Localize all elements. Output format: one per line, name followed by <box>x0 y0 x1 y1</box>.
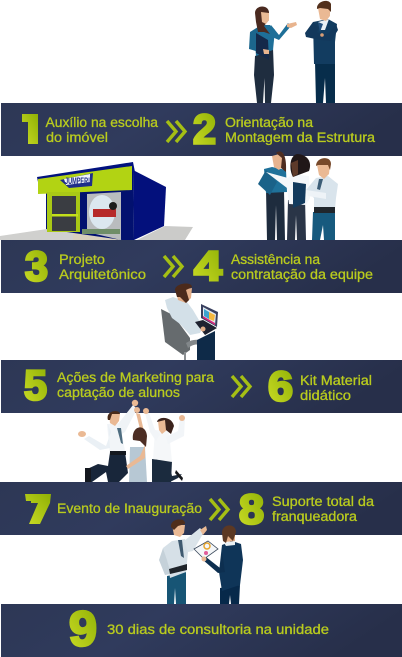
front wall <box>46 165 134 240</box>
roof fascia <box>37 162 135 182</box>
sign board <box>38 166 132 194</box>
head <box>176 288 192 303</box>
number 3: 3 <box>25 242 48 290</box>
number 8: 8 <box>239 486 264 532</box>
woman in white blazer <box>266 154 310 240</box>
tablet <box>194 541 218 559</box>
arrow: steps 7 to 8 <box>210 499 228 520</box>
text: step 4: Assistência na <box>231 252 321 267</box>
arrow: steps 3 to 4 <box>164 256 182 277</box>
laptop <box>195 304 218 335</box>
side wall <box>133 170 166 240</box>
text: step 8: Suporte total da <box>272 494 375 509</box>
text: step 3: Projeto <box>59 252 105 267</box>
illustration: team of three <box>258 151 338 240</box>
panel: steps 7 and 8 <box>0 482 402 535</box>
window <box>82 192 121 240</box>
panel: steps 3 and 4 <box>1 240 402 293</box>
number 7 <box>25 494 51 524</box>
text: step 9: 30 dias de consultoria na unidade <box>107 622 329 637</box>
panel: steps 5 and 6 <box>1 360 402 413</box>
man in shirt <box>306 158 338 240</box>
panel: steps 1 and 2 <box>1 103 402 156</box>
woman <box>249 6 297 103</box>
man in suit <box>202 525 243 604</box>
logo: JUMPER! <box>65 176 90 186</box>
jumping man <box>78 400 138 482</box>
woman in grey dress <box>126 407 147 482</box>
number 4: 4 <box>194 242 223 290</box>
text: step 6: didático <box>300 388 351 403</box>
text: step 4: contratação da equipe <box>231 267 373 282</box>
man <box>305 1 338 103</box>
text: step 1: Auxílio na escolha <box>46 115 158 130</box>
logo <box>60 173 93 188</box>
hand <box>200 326 206 332</box>
text: step 1: do imóvel <box>46 130 108 145</box>
text: step 3: Arquitetônico <box>59 267 146 282</box>
chair <box>161 309 208 360</box>
man in shirt <box>159 519 207 604</box>
number 6: 6 <box>268 362 293 410</box>
illustration: man with laptop on chair <box>161 283 218 360</box>
panel: step 9 <box>1 602 402 657</box>
text: step 7: Evento de Inauguração <box>57 501 202 516</box>
number 1 <box>22 114 38 144</box>
text: step 8: franqueadora <box>272 509 358 524</box>
arrow: steps 1 to 2 <box>167 121 185 142</box>
illustration: celebrating group <box>78 400 185 482</box>
text: step 2: Montagem da Estrutura <box>225 130 376 145</box>
arrow: steps 5 to 6 <box>232 376 250 397</box>
illustration: woman and man talking <box>249 1 338 103</box>
number 2: 2 <box>193 106 216 152</box>
text: step 6: Kit Material <box>300 373 372 388</box>
shirt <box>165 297 203 335</box>
text: step 5: Ações de Marketing para <box>57 370 215 385</box>
text: step 5: captação de alunos <box>57 385 180 400</box>
woman in teal <box>258 151 287 240</box>
legs <box>197 331 215 360</box>
illustration: two men with tablet <box>159 519 243 604</box>
number 5: 5 <box>24 362 47 408</box>
woman with ponytail <box>143 408 185 482</box>
door <box>47 192 80 232</box>
ground <box>0 229 124 240</box>
number 9: 9 <box>69 602 97 656</box>
illustration: Jumper storefront <box>0 162 193 240</box>
text: step 2: Orientação na <box>225 115 314 130</box>
